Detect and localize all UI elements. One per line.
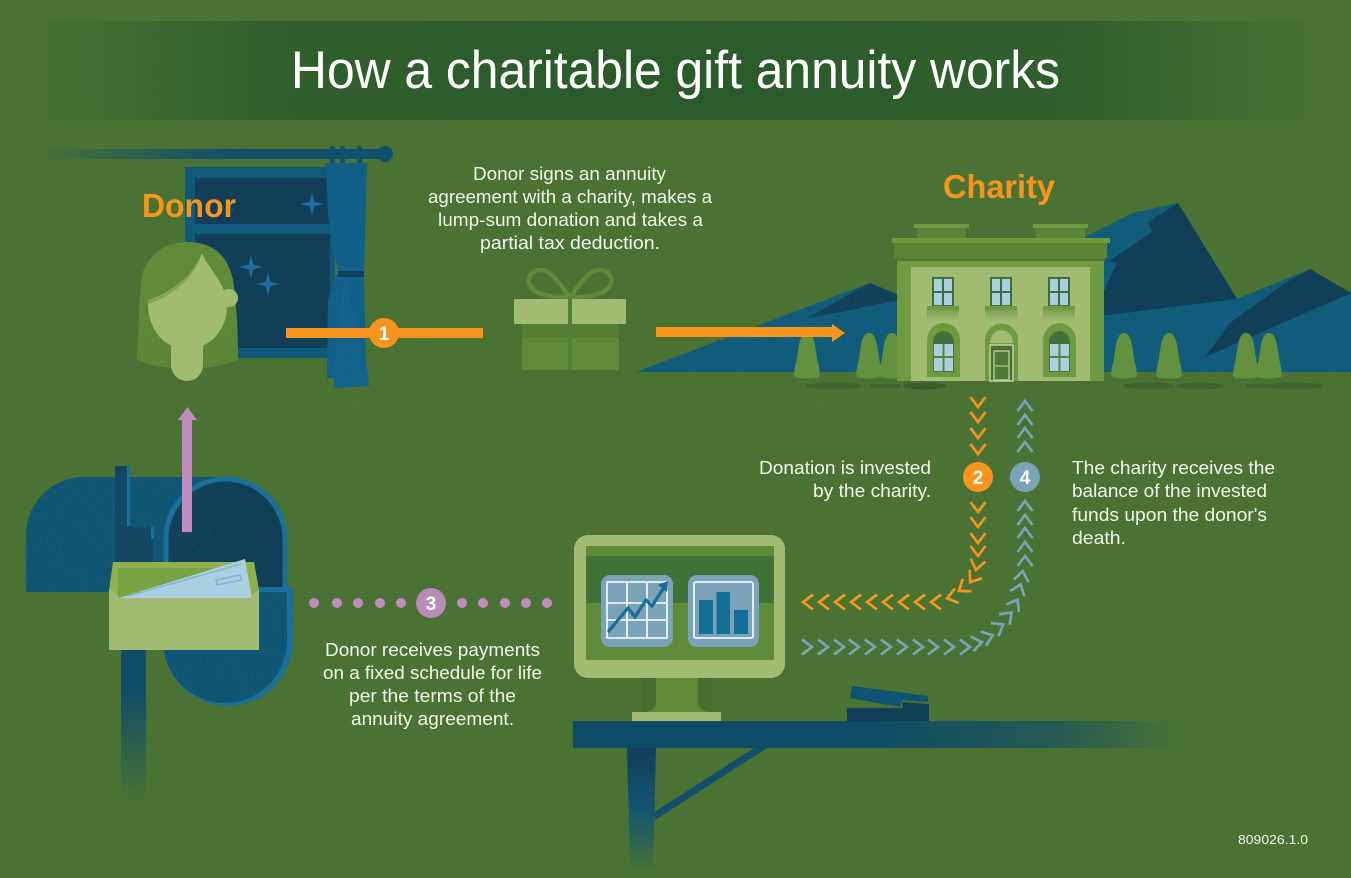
dotted line: step 3 (309, 588, 552, 618)
stapler (847, 686, 929, 721)
door (985, 324, 1018, 381)
step 3 description (323, 639, 542, 729)
step 1 description (428, 163, 713, 253)
step 1 badge: 1 (379, 324, 390, 345)
desk leg (627, 748, 656, 868)
title banner (0, 21, 1351, 120)
mailbox post (121, 640, 146, 802)
step 1 description: partial tax deduction. (480, 232, 660, 253)
illustration: desk and stapler (573, 686, 1180, 868)
step 1 description: Donor signs an annuity (473, 163, 667, 184)
curtain (326, 163, 369, 388)
step 4 description: death. (1072, 527, 1126, 548)
donor ear (220, 289, 238, 307)
step 4 description (1072, 457, 1275, 548)
step 3 description: annuity agreement. (351, 708, 514, 729)
step 1 description: agreement with a charity, makes a (428, 186, 713, 207)
arrow: step 3 up to donor (178, 407, 197, 532)
illustration: monitor (574, 535, 785, 721)
donor hair (137, 242, 238, 369)
heading: charity: Charity (943, 168, 1056, 205)
upper windows (927, 278, 1075, 321)
mailbox body (26, 477, 215, 592)
desk top (573, 721, 1180, 748)
step 3 description: Donor receives payments (325, 639, 540, 660)
step 2 description (759, 457, 931, 501)
illustration: mailbox (26, 407, 293, 786)
step 2 badge (963, 462, 993, 492)
step 2 description: by the charity. (813, 480, 931, 501)
donor neck (171, 338, 203, 381)
curtain rod (38, 146, 393, 164)
arrow: step 2 chevrons from charity to monitor (803, 397, 986, 610)
illustration: trees (794, 333, 1323, 390)
illustration: charity building (892, 224, 1110, 381)
reference code: 809026.1.0 (1238, 832, 1308, 847)
bar chart panel (688, 575, 759, 647)
step 4 badge (1010, 462, 1040, 492)
monitor stand (632, 678, 721, 721)
step 3 description: on a fixed schedule for life (323, 662, 542, 683)
donor face shadow (148, 253, 204, 308)
arrow: step 1 gift to charity (656, 324, 845, 342)
step 4 description: funds upon the donor's (1072, 504, 1267, 525)
mailbox lower door (163, 587, 293, 706)
step 1 badge (369, 318, 399, 348)
monitor frame (574, 535, 785, 678)
lower arched windows (927, 323, 1076, 377)
window (185, 167, 335, 358)
step 1 description: lump-sum donation and takes a (438, 209, 704, 230)
mailbox open door (166, 479, 285, 590)
desk brace (653, 748, 767, 820)
step 2 badge: 2 (973, 468, 983, 489)
line chart panel (601, 575, 673, 647)
arrow: step 1 donor to gift (286, 318, 483, 348)
icon: gift (514, 270, 626, 370)
step 4 badge: 4 (1020, 468, 1031, 489)
step 4 description: The charity receives the (1072, 457, 1275, 478)
envelope with check (109, 559, 259, 650)
monitor screen (586, 546, 774, 660)
illustration: mountains (636, 203, 1351, 372)
step 3 description: per the terms of the (349, 685, 516, 706)
heading: donor: Donor (142, 187, 236, 224)
donor face (148, 253, 227, 349)
step 2 description: Donation is invested (759, 457, 931, 478)
step 4 description: balance of the invested (1072, 480, 1267, 501)
illustration: donor at window (65, 146, 393, 388)
mailbox flag (115, 466, 154, 567)
arrow: step 4 chevrons from monitor to charity (802, 401, 1032, 654)
step 3 badge: 3 (426, 594, 436, 615)
step 3 badge (416, 588, 446, 618)
title: How a charitable gift annuity works (291, 41, 1060, 100)
